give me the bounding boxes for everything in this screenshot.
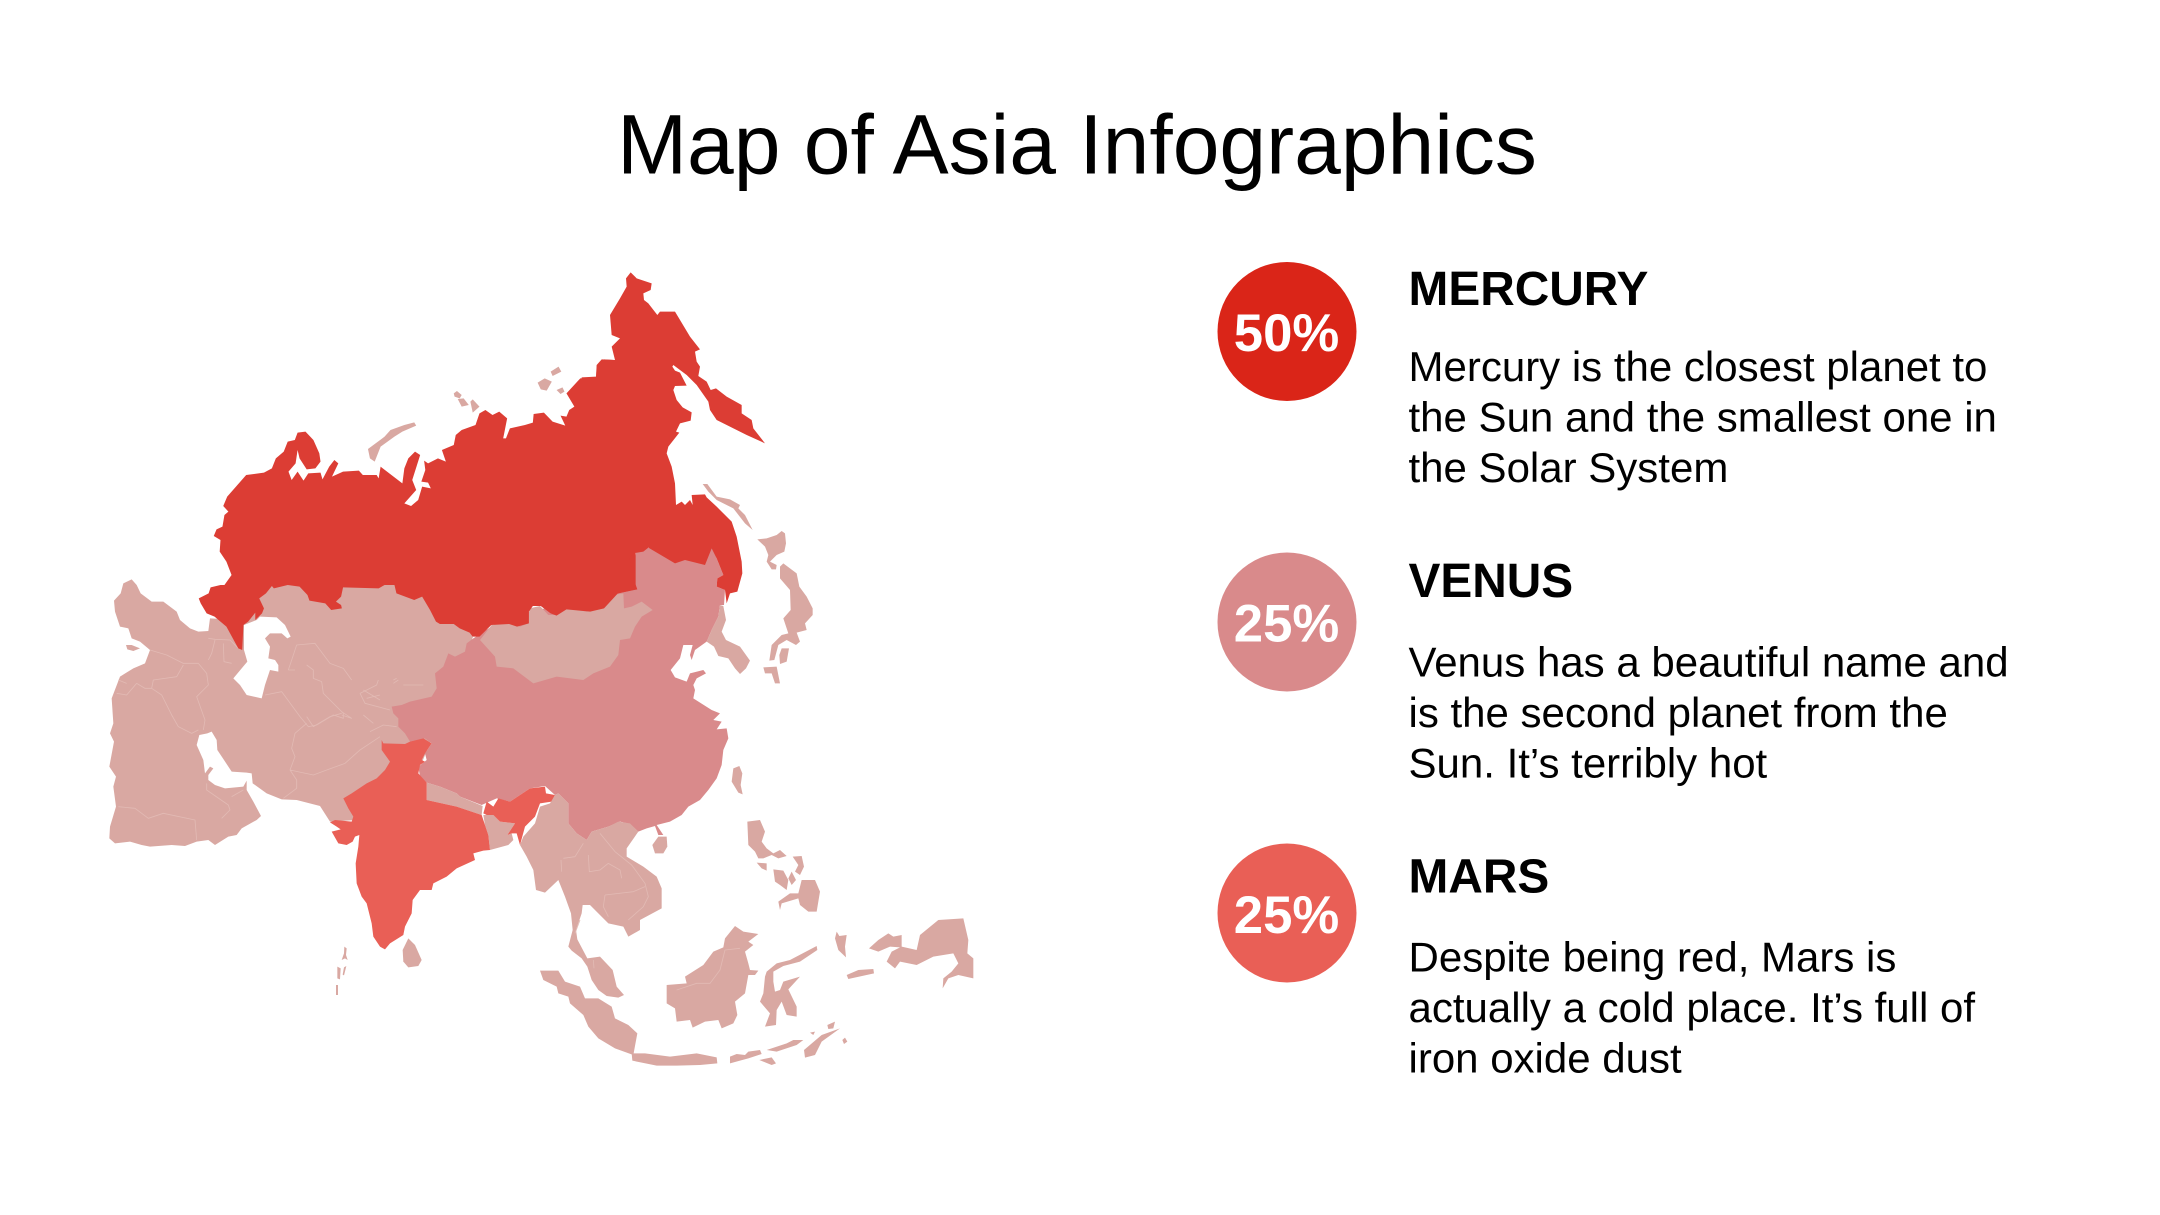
description: Mars: iron oxide dust [1408, 1034, 1682, 1082]
region: Sakhalin [703, 484, 753, 530]
description: Mercury: Mercury is the closest planet to [1408, 343, 1987, 390]
description: Mars: actually a cold place. It’s full of [1408, 984, 1975, 1031]
percentage badge: 25%: 25% [1234, 886, 1339, 945]
map of Asia [109, 272, 973, 1066]
percentage badge: 50% [1218, 262, 1356, 401]
description: Mars [1408, 934, 1975, 1082]
title: Map of Asia Infographics [617, 98, 1537, 192]
region: Caspian Sea [233, 617, 291, 698]
description: Venus: is the second planet from the [1408, 689, 1948, 736]
region: rest of Asia, west (Turkey, Middle East, Central Asia) [109, 579, 473, 847]
islands: Hainan, Taiwan [652, 837, 667, 853]
region: Sri Lanka and Maldives [336, 938, 422, 995]
description: Venus: Sun. It’s terribly hot [1408, 740, 1768, 786]
item: Venus [1218, 552, 2009, 786]
islands: Indonesia [540, 971, 637, 1055]
region: Southeast Asia [520, 766, 973, 1066]
heading: Mercury: MERCURY [1408, 263, 1648, 316]
description: Mercury: the Solar System [1408, 444, 1728, 491]
region: central Asia border lines [307, 678, 423, 732]
description: Venus: Venus has a beautiful name and [1408, 638, 2009, 686]
description: Mars: Despite being red, Mars is [1408, 934, 1896, 980]
heading: Venus: VENUS [1408, 555, 1573, 608]
region: Russia [199, 272, 765, 650]
percentage badge: 50%: 50% [1234, 304, 1339, 363]
item: Mercury [1218, 262, 1997, 491]
description: Mercury [1408, 343, 1997, 491]
description: Venus [1408, 638, 2009, 786]
description: Mercury: the Sun and the smallest one in [1408, 394, 1997, 440]
region: Mongolia, Nepal, Bangladesh [427, 593, 653, 850]
region: India [330, 738, 555, 949]
percentage badge: 25% [1218, 844, 1356, 982]
region: Arctic islands [368, 367, 564, 462]
region: Korea and Japan [707, 531, 813, 683]
item: Mars [1218, 844, 1975, 1082]
region: China [392, 545, 728, 840]
heading: Mars: MARS [1408, 850, 1549, 904]
islands: Philippines [747, 820, 787, 858]
percentage badge: 25% [1218, 552, 1356, 692]
percentage badge: 25%: 25% [1234, 594, 1339, 654]
Hokkaido [757, 531, 786, 569]
